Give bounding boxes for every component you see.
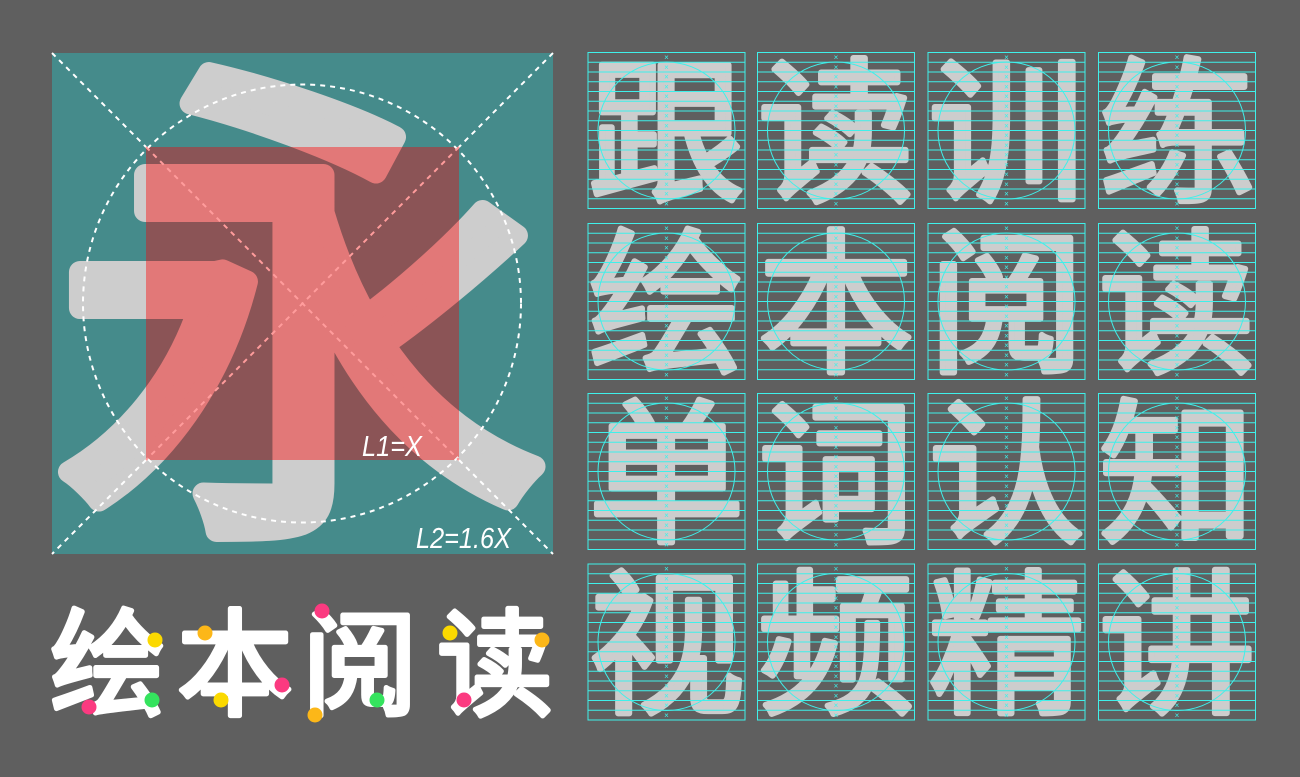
row 1: 跟读训练: 练: [1099, 49, 1255, 223]
logo characters: 阅: [302, 601, 418, 731]
logo title: 绘本阅读 with coloured dots: [50, 601, 553, 731]
row 3: 单词认知: 单: [588, 390, 744, 564]
row 2: 绘本阅读: 绘: [588, 220, 744, 394]
inner dark square L1: [146, 147, 459, 460]
row 3: 单词认知: [588, 390, 1256, 564]
row 4: 视频精讲: 讲: [1099, 561, 1255, 735]
coloured dots: [82, 604, 550, 722]
row 4: 视频精讲: [588, 561, 1256, 735]
logo characters: 绘: [50, 601, 166, 731]
row 4: 视频精讲: 精: [928, 561, 1084, 735]
row 4: 视频精讲: 视: [588, 561, 744, 735]
label L1: L1=X: [362, 431, 423, 463]
row 2: 绘本阅读: 读: [1099, 220, 1255, 394]
row 2: 绘本阅读: 本: [758, 220, 914, 394]
row 4: 视频精讲: 频: [758, 561, 914, 735]
row 2: 绘本阅读: [588, 220, 1256, 394]
teal square: [52, 53, 553, 554]
character 永 in pink, clipped to inner square: 永: [52, 39, 552, 598]
row 1: 跟读训练: 读: [758, 49, 914, 223]
row 2: 绘本阅读: 阅: [928, 220, 1084, 394]
row 1: 跟读训练: 跟: [588, 49, 744, 223]
panel: character grid specimens: [588, 49, 1256, 735]
row 1: 跟读训练: [588, 49, 1256, 223]
logo characters: 读: [437, 601, 553, 731]
row 3: 单词认知: 词: [758, 390, 914, 564]
dashed guide lines and circle: [52, 53, 553, 554]
row 3: 单词认知: 认: [928, 390, 1084, 564]
row 1: 跟读训练: 训: [928, 49, 1084, 223]
label L2: L2=1.6X: [416, 523, 512, 555]
panel: 永 construction diagram: [52, 39, 553, 598]
logo characters: [50, 601, 553, 731]
row 3: 单词认知: 知: [1099, 390, 1255, 564]
logo characters: 本: [177, 601, 293, 731]
character 永 in grey: 永: [52, 39, 552, 598]
